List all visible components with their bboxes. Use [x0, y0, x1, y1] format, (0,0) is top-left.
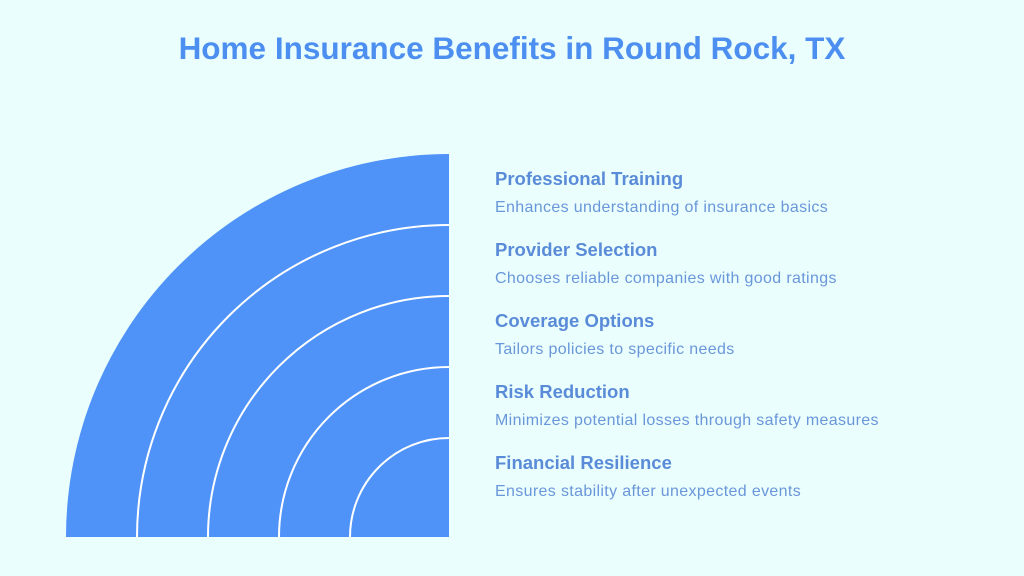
item: Provider Selection: [495, 239, 837, 287]
item: Professional Training: Professional Training: [495, 168, 683, 189]
item: Coverage Options: Coverage Options: [495, 310, 654, 331]
item: Provider Selection: Chooses reliable companies with good ratings: [495, 270, 837, 287]
item: Financial Resilience: Financial Resilience: [495, 452, 672, 473]
item: Coverage Options: Tailors policies to specific needs: [495, 341, 735, 358]
item: Risk Reduction: Minimizes potential losses through safety measures: [495, 412, 879, 429]
item: Financial Resilience: Ensures stability after unexpected events: [495, 483, 801, 500]
item: Coverage Options: [495, 310, 735, 358]
item: Professional Training: [495, 168, 828, 216]
item: Professional Training: Enhances understanding of insurance basics: [495, 199, 828, 216]
item: Risk Reduction: Risk Reduction: [495, 381, 630, 402]
item: Risk Reduction: [495, 381, 879, 429]
item: Financial Resilience: [495, 452, 801, 500]
item: Provider Selection: Provider Selection: [495, 239, 657, 260]
title: Home Insurance Benefits in Round Rock, TX: [179, 30, 845, 66]
